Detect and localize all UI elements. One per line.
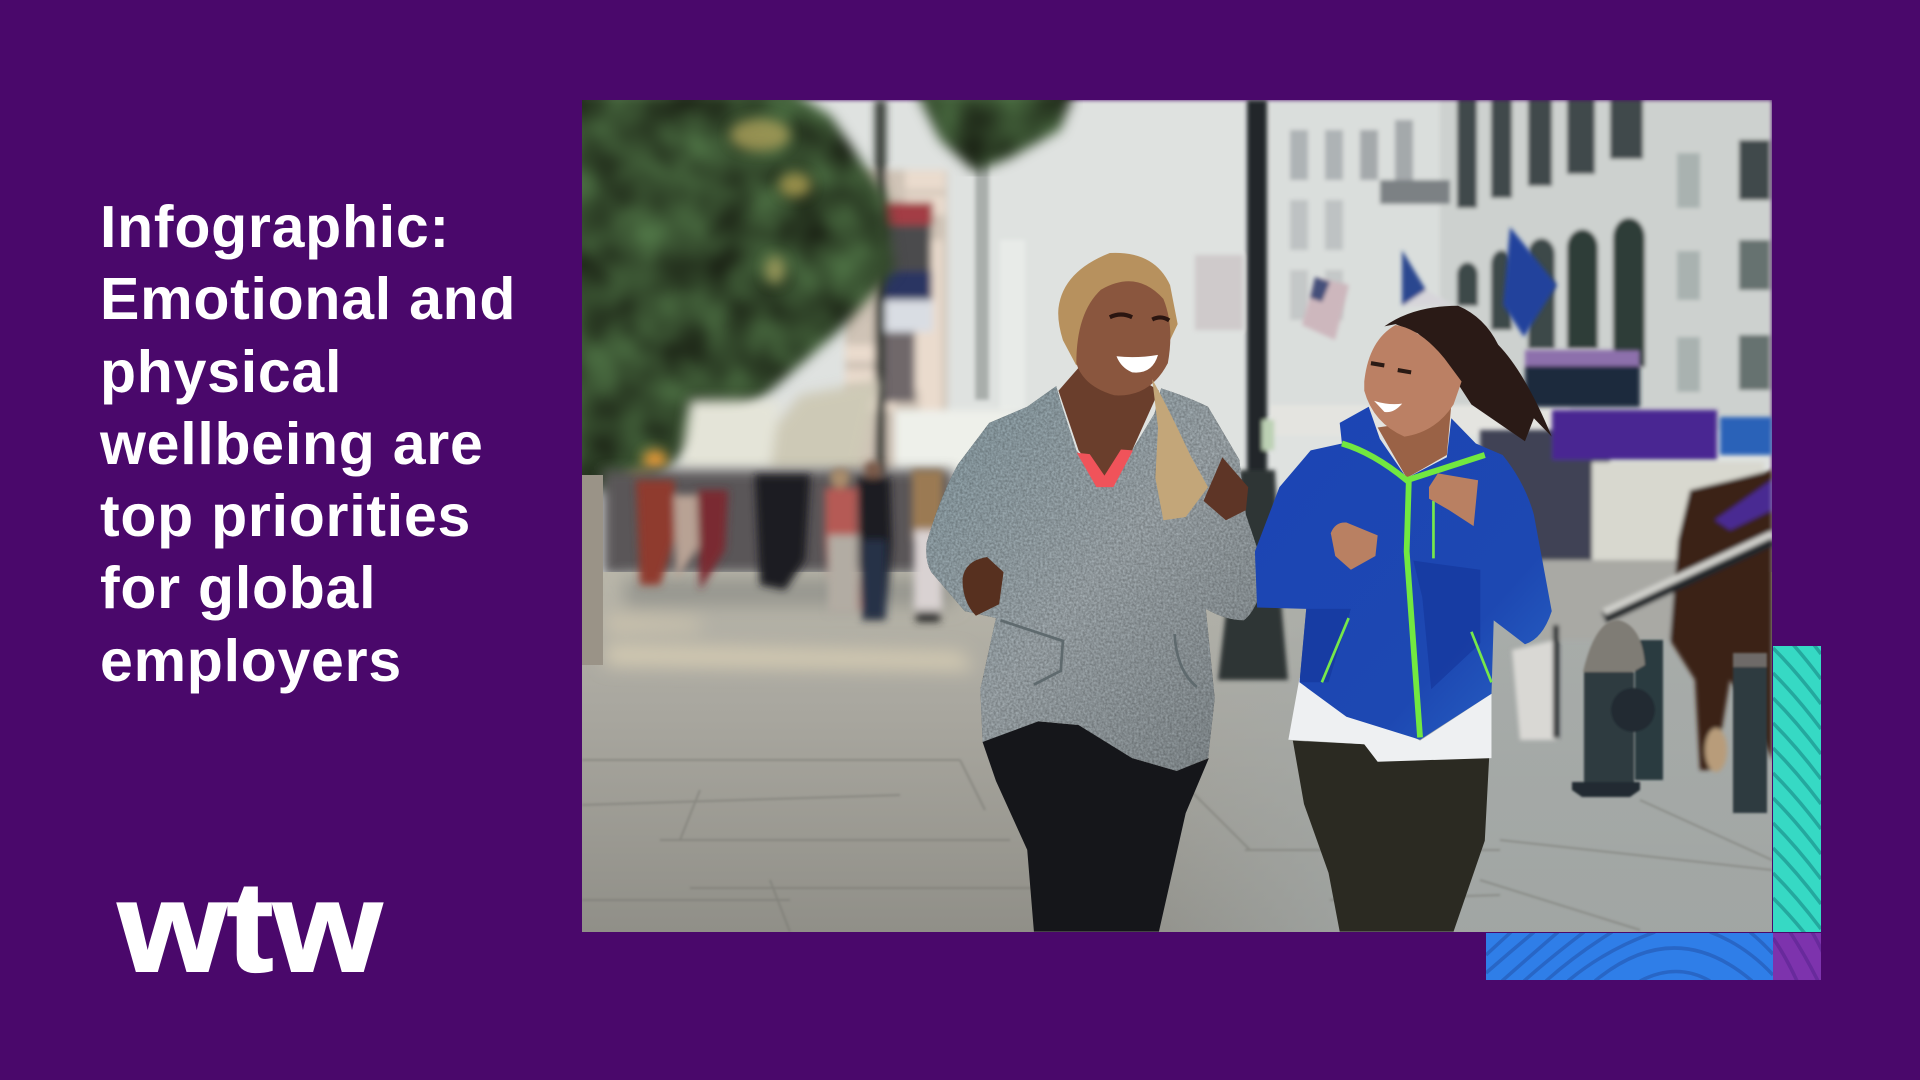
accent strip: blue (1486, 932, 1773, 981)
neck (1378, 404, 1451, 478)
woman in blue jacket (1255, 306, 1552, 932)
white shirt (1288, 678, 1491, 762)
title (100, 194, 516, 694)
green zipper and collar (1342, 444, 1485, 737)
logo: wtw: wtw (117, 856, 382, 999)
eyes (1371, 363, 1411, 372)
title: Infographic: (100, 194, 450, 260)
leggings (1293, 741, 1489, 932)
crowd backdrop (603, 470, 953, 575)
hoodie body (926, 386, 1266, 771)
eyes (1110, 314, 1169, 320)
accent strip: purple corner (1773, 932, 1824, 981)
pocket seams (1000, 620, 1197, 687)
hands (1331, 522, 1378, 570)
stone pillar (582, 475, 603, 665)
title: top priorities (100, 483, 471, 549)
backdrop: tree foliage (570, 90, 1075, 492)
title: for global (100, 555, 376, 621)
red neckline (1077, 449, 1133, 487)
neck and chest (1058, 368, 1159, 483)
ponytail and hair (1384, 306, 1552, 441)
blurred pedestrians (636, 461, 943, 622)
backdrop: flags (1302, 227, 1557, 340)
right sidewalk tint (1192, 609, 1772, 932)
woman in grey hoodie (926, 253, 1266, 932)
smile (1117, 355, 1158, 373)
title: employers (100, 628, 402, 694)
accent strip: teal (1773, 598, 1821, 954)
title: physical (100, 339, 342, 405)
title: Emotional and (100, 266, 516, 332)
face (1076, 281, 1170, 395)
jacket shading (1300, 561, 1480, 689)
smile (1374, 401, 1402, 412)
sidewalk (582, 572, 1772, 932)
paving joints (582, 760, 1772, 932)
photo: two women jogging on a city sidewalk (570, 90, 1772, 932)
hydrants and bollard (1572, 620, 1767, 813)
leggings (983, 721, 1209, 932)
ponytail (1152, 379, 1208, 520)
fists (962, 557, 1004, 616)
photo and accent artwork (116, 100, 1821, 980)
face (1364, 325, 1462, 437)
carriage and planter (1480, 350, 1772, 772)
backdrop: buildings (582, 100, 1772, 600)
lamp post (1195, 100, 1288, 680)
jacket (1255, 407, 1552, 740)
backdrop: street banner and warm lights (845, 100, 1015, 480)
hair (1058, 253, 1178, 365)
sunlit patches (606, 578, 975, 670)
title: wellbeing are (100, 411, 484, 477)
